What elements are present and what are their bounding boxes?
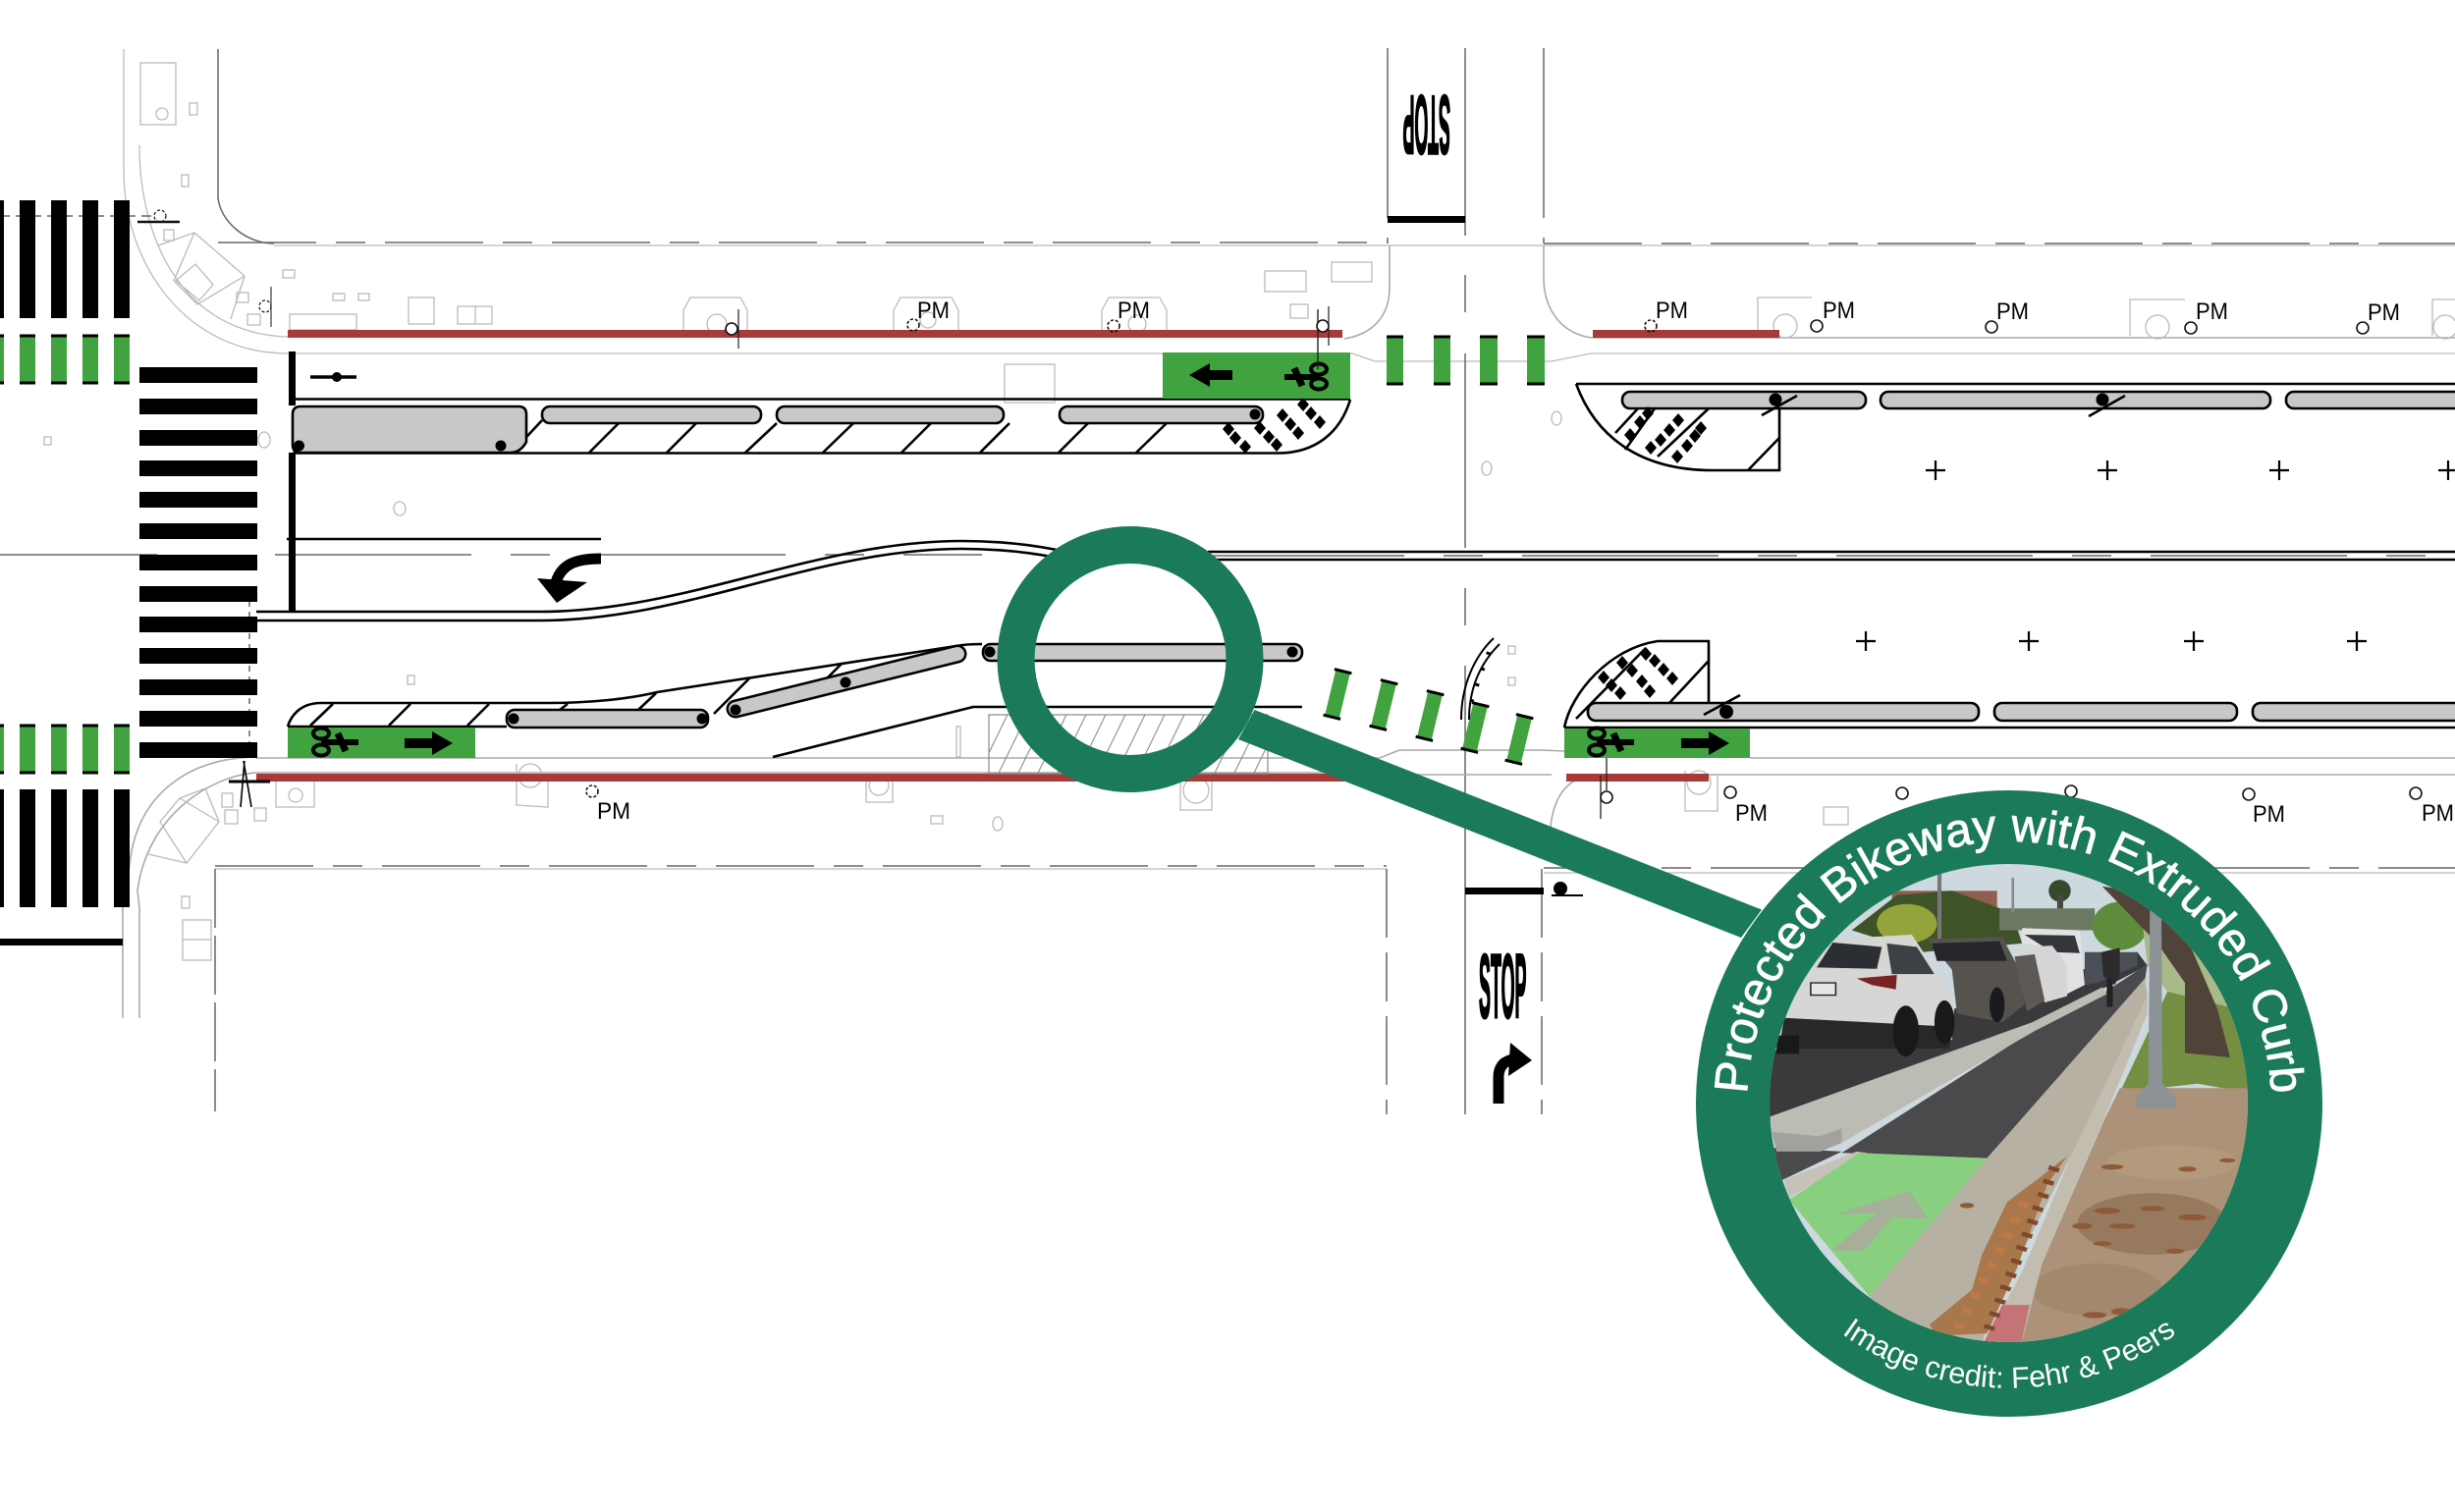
curved crossing arcs (1461, 638, 1500, 720)
parking meter labels: PM (2253, 801, 2285, 828)
right turn pavement arrow (1499, 1043, 1532, 1104)
STOP pavement text, lower approach: STOP (1479, 937, 1527, 1038)
stop bars (289, 216, 1544, 894)
left bike crossing bottom: green bars (0, 726, 130, 773)
corner signal marker top (137, 210, 271, 327)
red curbs (256, 330, 1779, 782)
angled green bike crossing bars (1324, 670, 1533, 764)
right lower green box with arrow and bike symbol (1564, 729, 1750, 819)
small sign icon (310, 373, 356, 381)
top buffer left: pills and hatching (293, 398, 1350, 454)
left crosswalk: vertical black bars bottom (0, 789, 130, 945)
parking meter labels: PM (1656, 297, 1688, 324)
left crosswalk: vertical black bars top (0, 200, 130, 318)
parking meter labels: PM (1118, 297, 1150, 324)
magnifier connector band (1238, 710, 1762, 938)
median lines: S curve (256, 539, 2455, 621)
parking meter labels: PM (1823, 297, 1855, 324)
hatched curb zone (989, 715, 1268, 774)
callout disc (1696, 790, 2322, 1417)
green mid-block bars across top (1387, 336, 1545, 385)
parking meter labels: PM (1996, 298, 2029, 325)
streetscape furniture outlines (44, 63, 2455, 960)
parking crosses (1856, 460, 2455, 651)
lower left buffer and hatching (288, 644, 1302, 757)
parking meter labels: PM (2196, 298, 2228, 325)
parking meter labels: PM (597, 798, 630, 825)
parking meter labels: PM (1735, 800, 1768, 827)
left bike crossing top: green bars (0, 336, 130, 383)
right lower median island (1564, 641, 2455, 728)
image credit: Image credit: Fehr & Peers (1844, 1318, 2174, 1388)
parking meter labels (586, 297, 2454, 828)
lower left green box with arrow and bike symbol (288, 728, 475, 758)
main crosswalk: horizontal black bars (139, 367, 257, 758)
parking meter labels: PM (917, 297, 950, 324)
parking meter labels: PM (2368, 299, 2400, 326)
stop sign marker lower (1552, 882, 1583, 895)
STOP pavement text, upper approach: STOP (1402, 79, 1450, 171)
cross marker at lower corner (229, 761, 270, 807)
top green box with arrow and bike symbol (1163, 306, 1350, 399)
magnifier ring on plan (1015, 545, 1245, 774)
photo of protected bikeway (1762, 856, 2272, 1351)
callout title: Protected Bikeway with Extruded Curb (1715, 810, 2305, 1092)
right top median island (1576, 384, 2455, 470)
left turn pavement arrow (537, 559, 601, 603)
street base lines (0, 48, 2455, 1114)
